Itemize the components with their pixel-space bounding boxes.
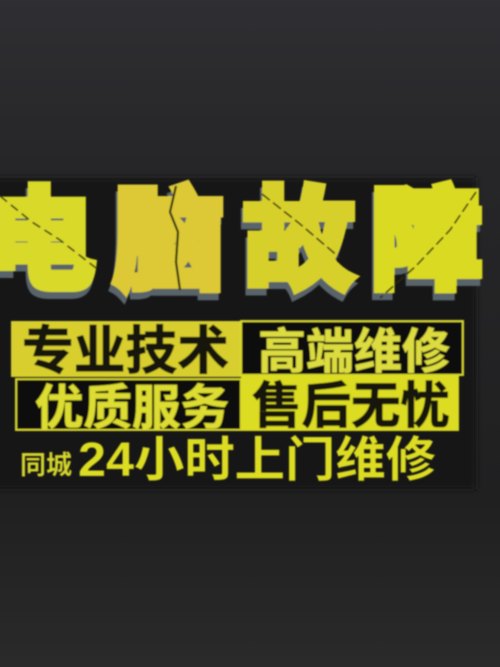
panel: 售后无忧: 售后无忧	[252, 378, 450, 434]
heading shadow	[0, 187, 480, 310]
heading: 电脑故障	[0, 180, 482, 310]
slogan panel	[11, 321, 463, 487]
crack lines	[0, 186, 476, 298]
heading shadow: 故	[242, 187, 352, 310]
heading face: 故	[244, 180, 354, 303]
black poster board	[0, 178, 476, 489]
panel: 专业技术: 专业技术	[22, 323, 229, 381]
panel: 高端维修: 高端维修	[258, 326, 450, 379]
text: 24小时上门维修: 24小时上门维修	[78, 434, 436, 487]
panel: 优质服务: 优质服务	[35, 382, 229, 435]
text: 同城: 同城	[20, 450, 72, 480]
heading shadow: 脑	[112, 187, 222, 310]
heading face	[0, 180, 482, 303]
heading face: 障	[372, 180, 482, 303]
heading face: 脑	[114, 180, 224, 303]
heading shadow: 障	[370, 187, 480, 310]
